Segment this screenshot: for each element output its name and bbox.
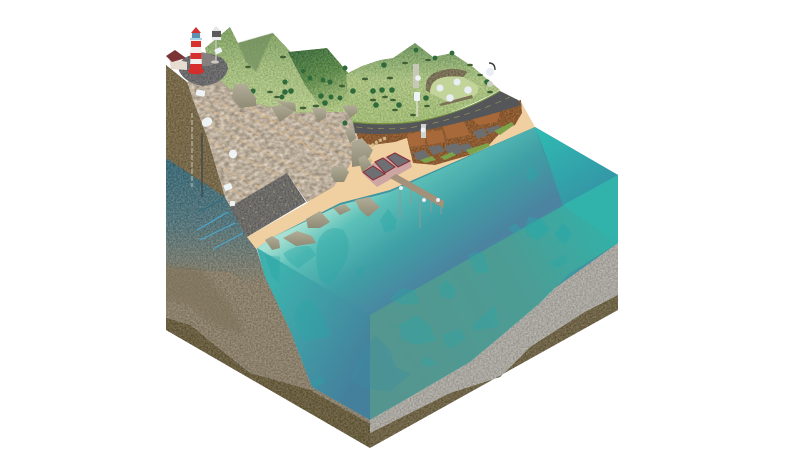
grass patches on slumps: [420, 122, 514, 163]
pier instruments: [399, 186, 440, 202]
left water face: [257, 248, 370, 420]
water surface: [257, 127, 563, 315]
blue rock drains: [197, 200, 243, 249]
pole sensor: [416, 96, 418, 117]
far underwater seabed wedge: [563, 175, 618, 243]
grey fallen slabs: [413, 125, 501, 160]
borehole dashed probe: [191, 113, 193, 187]
cliff boulders: [232, 84, 373, 182]
quarry crater with sensors: [426, 69, 478, 106]
water backing: [257, 127, 618, 420]
left soil face: [150, 65, 370, 448]
right seabed face: [370, 243, 618, 448]
grey rock-bolted mesh slope: [230, 173, 306, 237]
rocky cliff face: [187, 82, 358, 207]
far-left mountain: [205, 27, 358, 113]
far underwater rocks: [380, 165, 572, 243]
weather station: [211, 26, 221, 64]
upper brown soil: [166, 65, 225, 197]
coastal road: [353, 91, 521, 134]
eroded brown coastal bluff: [355, 100, 522, 165]
pier deck: [390, 174, 444, 208]
water body: [257, 127, 618, 420]
crater instruments: [436, 78, 472, 102]
dark bottom layer: [370, 295, 618, 448]
wooden pier: [390, 174, 444, 228]
red houses: [362, 153, 412, 187]
bluff mast sensor: [421, 124, 426, 138]
gravel layer: [370, 243, 618, 433]
water surface far corner: [535, 127, 618, 205]
tower sensor: [413, 64, 419, 88]
cliff-edge dish sensor: [486, 68, 494, 76]
cliff monitoring sensors: [196, 47, 237, 206]
isometric coastal block diagram: [166, 26, 618, 448]
peach strata streaks: [190, 100, 355, 199]
pier pilings: [400, 187, 441, 228]
lighthouse: [188, 27, 204, 74]
house two roof: [375, 158, 395, 173]
underwater rocks: [265, 218, 572, 392]
lighthouse headland platform: [178, 52, 228, 86]
dark bottom soil layer: [166, 318, 370, 448]
borehole dark probe: [201, 133, 203, 197]
small red-roofed house: [166, 50, 187, 70]
right water face: [370, 175, 618, 420]
trees on the hills: [250, 48, 490, 126]
wooden stairs: [368, 138, 386, 162]
mesh anchors: [242, 184, 297, 227]
hilltop instruments: [413, 63, 495, 138]
bluff slump blocks: [407, 112, 500, 147]
house one roof: [363, 166, 385, 180]
shoreline boulders: [265, 197, 380, 250]
dark bushes: [245, 56, 493, 116]
right green plateau: [346, 43, 500, 124]
dark green central mountain: [288, 48, 362, 112]
saturated blue groundwater zone: [166, 158, 278, 305]
mountain shaded gully: [238, 33, 273, 72]
sandy beach: [247, 100, 535, 250]
land backing behind cliff and hills: [187, 60, 360, 207]
house three roof: [387, 153, 410, 167]
darker mid soil patch: [166, 265, 242, 332]
